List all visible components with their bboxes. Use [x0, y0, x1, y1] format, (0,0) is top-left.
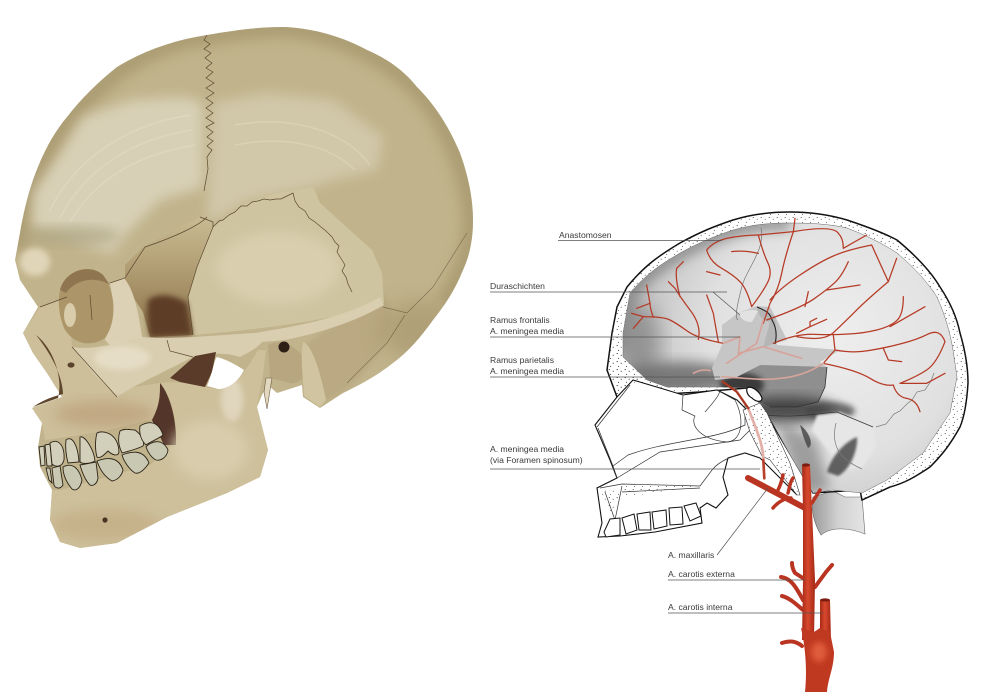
faded arteries beneath dura [693, 320, 823, 379]
label: Ramus frontalis: A. meningea media [490, 326, 564, 336]
squamous light patch [216, 232, 340, 304]
skull silhouette [15, 27, 473, 548]
lower teeth [46, 442, 168, 490]
shadow behind jaw [152, 383, 176, 445]
facial bone contours [597, 385, 760, 520]
meningeal stem below skull [763, 460, 764, 478]
carotid system [748, 463, 834, 692]
meningeal main stem [723, 382, 748, 408]
right illustration: meningeal arteries [490, 212, 968, 692]
nasal aperture [33, 335, 63, 407]
middle meningeal artery branches [632, 218, 945, 478]
mandibular notch [207, 357, 244, 389]
label: A. carotis interna: A. carotis interna [668, 602, 733, 612]
internal carotid [820, 600, 831, 640]
label: A. meningea media via Foramen spinosum: A. meningea media [490, 444, 564, 454]
common carotid bulb [801, 628, 834, 692]
label: Anastomosen: Anastomosen [559, 230, 612, 240]
skull base diploe wedge [743, 403, 800, 495]
mid-face bone [23, 297, 165, 440]
label: Duraschichten: Duraschichten [490, 281, 545, 291]
dura shading [620, 223, 876, 495]
external carotid trunk [802, 465, 815, 640]
maxilla shading above teeth [55, 401, 155, 427]
upper teeth [39, 423, 163, 466]
ear region [264, 342, 326, 409]
carotid branches [748, 475, 832, 646]
lateral orbital rim [105, 278, 160, 360]
infraorbital foramen [68, 362, 74, 368]
brush strokes on vault [50, 115, 370, 222]
cranial sutures inside dura [736, 228, 934, 469]
mandible shading [50, 378, 248, 540]
vessel openings [802, 463, 830, 602]
neck dura section [812, 491, 865, 535]
teeth row [604, 503, 701, 537]
painterly bone shading [15, 27, 473, 405]
skull vault bone [607, 212, 968, 500]
zygomatic arch and cheekbone [72, 297, 384, 397]
skull base and face [595, 380, 797, 537]
cheekbone highlight [94, 346, 150, 370]
temporal fossa [125, 217, 213, 337]
leader lines [490, 240, 823, 613]
whole mandible [50, 350, 268, 548]
label: A. maxillaris: A. maxillaris [668, 550, 714, 560]
meningeal artery within bone [748, 408, 763, 460]
diploe dots [607, 212, 968, 500]
bulb highlight [811, 642, 827, 662]
temporal fossa deep shadow [147, 295, 192, 337]
squamous temporal bone [188, 187, 384, 335]
sutures [40, 35, 467, 397]
label: Ramus parietalis: Ramus parietalis [490, 355, 554, 365]
dura window region [712, 306, 873, 427]
mental foramen [102, 517, 108, 523]
skull base dots [600, 333, 800, 518]
orbit [59, 269, 113, 343]
frontal branch tree [632, 262, 723, 343]
upper vault tree [707, 218, 897, 338]
label: A. meningea media via Foramen spinosum: (via Foramen spinosum) [490, 455, 583, 465]
label: Ramus frontalis: Ramus frontalis [490, 315, 550, 325]
shadow under zygomatic arch [170, 352, 216, 387]
foramen spinosum bone spur [747, 387, 762, 401]
label: A. carotis externa: A. carotis externa [668, 569, 735, 579]
parietal branch tree [773, 297, 945, 412]
inner cranial cavity (dura) [623, 223, 957, 493]
label: Ramus parietalis: A. meningea media [490, 366, 564, 376]
left illustration: lateral skull [15, 27, 473, 548]
